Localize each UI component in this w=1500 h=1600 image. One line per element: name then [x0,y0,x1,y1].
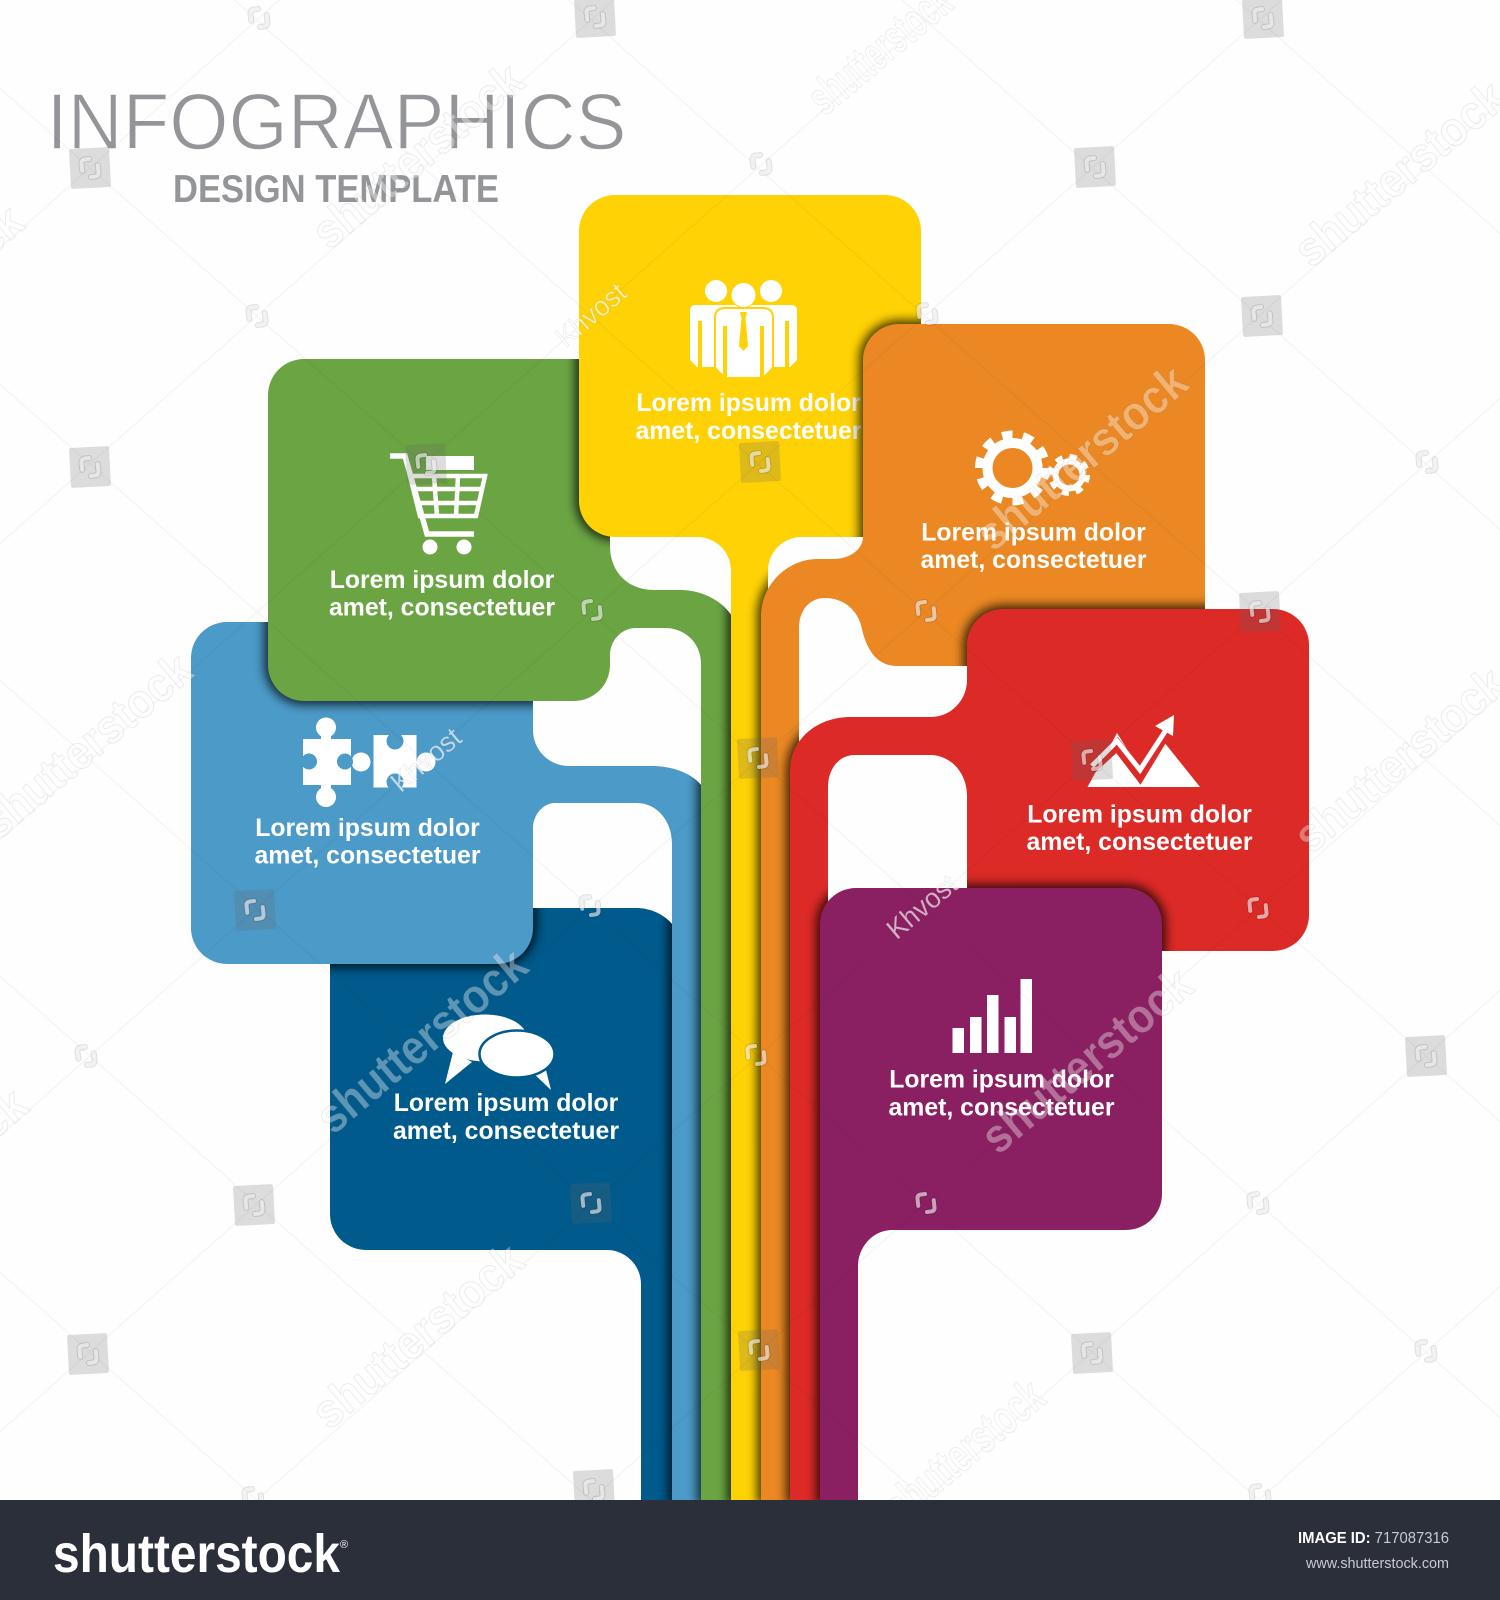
text: red label: Lorem ipsum dolor [1027,802,1252,828]
text: orange label: Lorem ipsum dolor [921,520,1146,546]
footer bar [0,1500,1500,1600]
icon: team of people [690,280,797,378]
title: INFOGRAPHICS [46,77,626,166]
text: red label: amet, consectetuer [1026,829,1253,856]
watermark layer: shutterstock [302,1233,534,1439]
watermark layer: shutterstock [971,958,1203,1164]
watermark layer: shutterstock [302,53,534,259]
footer url: www.shutterstock.com [1305,1555,1449,1572]
panel: yellow card [579,195,921,1500]
icon: puzzle pieces [301,718,436,807]
icon: bar chart [952,979,1032,1053]
title [46,77,626,211]
watermark layer: Khvost [385,721,467,798]
footer registered mark: ® [340,1539,348,1551]
panel: green card [268,359,739,1500]
watermark layer: Khvost [881,868,963,945]
text: yellow label: Lorem ipsum dolor [636,390,861,417]
watermark layer: Khvost [550,276,632,353]
icon: gears [980,435,1088,501]
icon: speech bubbles [443,1014,554,1090]
watermark layer: shutterstock [966,355,1198,561]
watermark layer: shutterstock [875,1370,1055,1532]
text: yellow label: amet, consectetuer [635,418,862,445]
text: green label: amet, consectetuer [329,594,555,622]
icon: shopping cart [390,456,485,554]
footer image id: IMAGE ID: 717087316 [1298,1530,1449,1547]
text: light blue label: amet, consectetuer [254,842,481,870]
text: purple label: Lorem ipsum dolor [889,1066,1114,1094]
watermark layer: shutterstock [306,938,538,1144]
text: green label: Lorem ipsum dolor [330,567,555,594]
footer logo: shutterstock [53,1524,341,1584]
text: orange label: amet, consectetuer [920,547,1147,574]
panel: navy card [330,908,680,1500]
text: light blue label: Lorem ipsum dolor [255,815,480,842]
subtitle: DESIGN TEMPLATE [173,168,499,211]
icon: mountain chart arrow [1088,715,1200,787]
panel: purple card [820,888,1162,1500]
panel: light blue card [191,622,710,1500]
text: purple label: amet, consectetuer [888,1094,1115,1122]
panel: red card [790,609,1309,1500]
text: navy label: Lorem ipsum dolor [394,1090,619,1117]
panel: orange card [761,324,1205,1500]
text: navy label: amet, consectetuer [393,1118,619,1145]
